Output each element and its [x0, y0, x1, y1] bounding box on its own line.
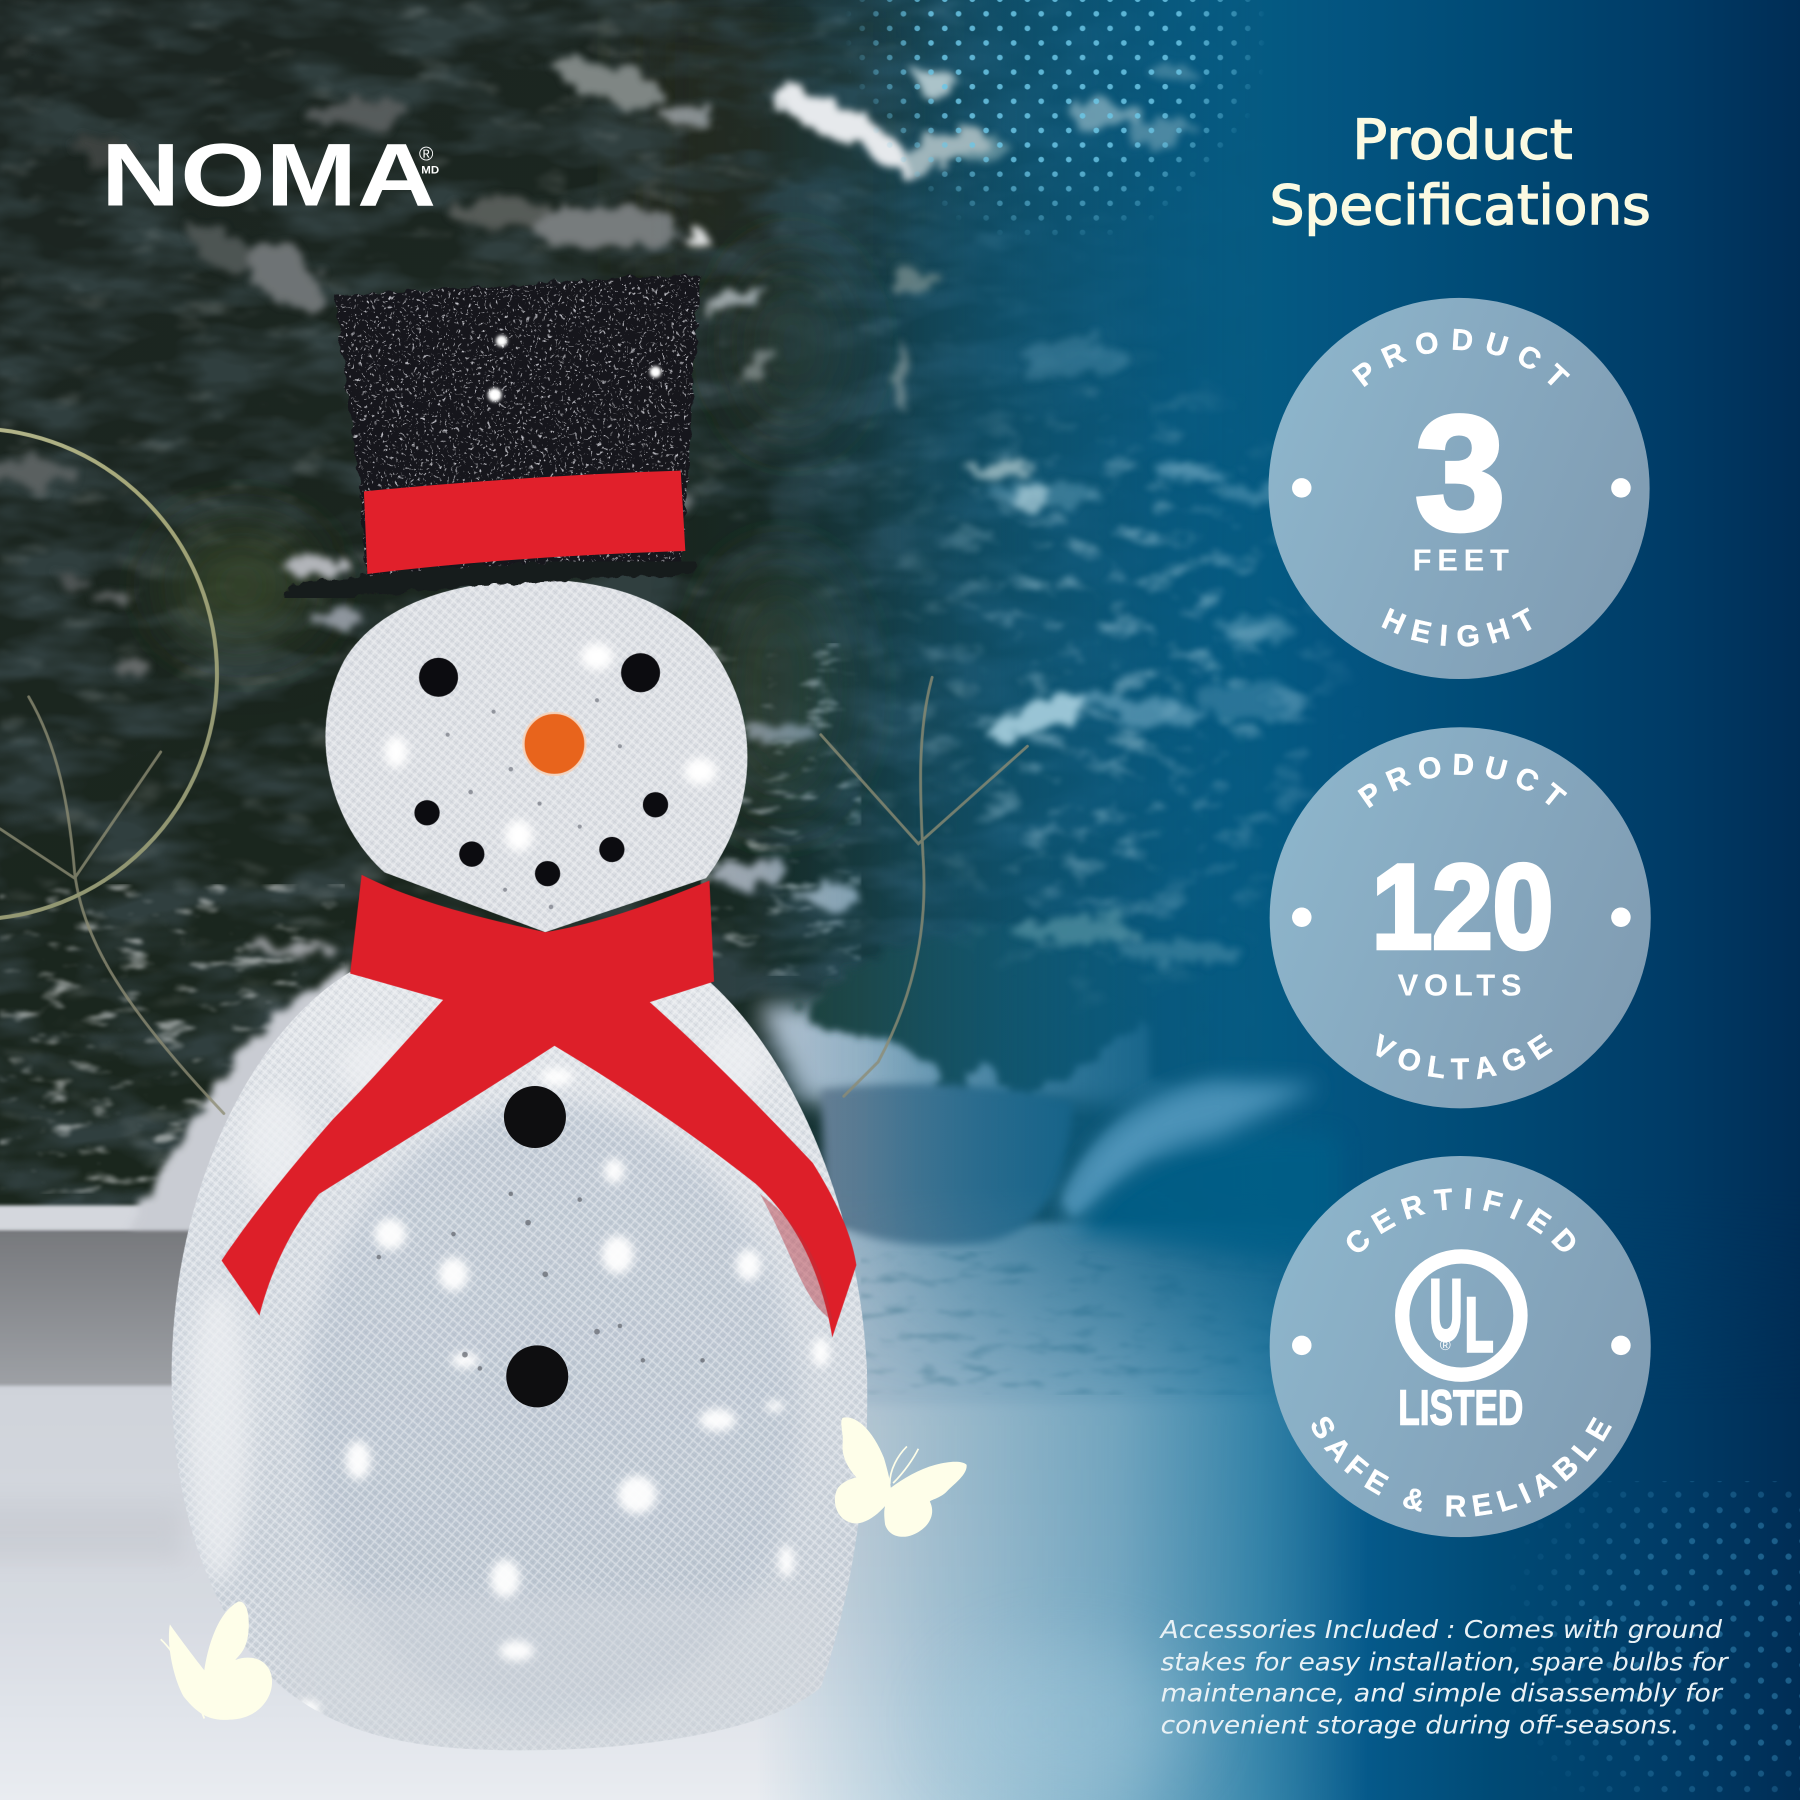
- badge: certified UL listed: SAFE & RELIABLE: [1303, 1406, 1622, 1524]
- title: Product Specifications: [1270, 108, 1651, 237]
- butterfly left: [161, 1601, 272, 1720]
- halftone dots, top: [848, 0, 1262, 235]
- badge: product voltage 120 volts: 120: [1372, 841, 1553, 974]
- badge: product voltage 120 volts: [1270, 727, 1651, 1108]
- badge: product voltage 120 volts: VOLTAGE: [1376, 1033, 1553, 1080]
- badge: product height 3 feet: PRODUCT: [1352, 328, 1570, 387]
- badge: product height 3 feet: FEET: [1413, 543, 1515, 578]
- NOMA logo: MD: [421, 164, 439, 176]
- NOMA logo: NOMA: [101, 124, 436, 224]
- face buttons: [414, 653, 668, 886]
- UL mark: ®: [1440, 1337, 1451, 1354]
- badge: product height 3 feet: 3: [1415, 381, 1506, 564]
- blue gradient overlay on right: [720, 0, 1800, 1800]
- accessories note: [1158, 1615, 1729, 1739]
- coat buttons: [504, 1086, 568, 1407]
- UL mark: LISTED: [1398, 1381, 1523, 1436]
- UL mark: L: [1465, 1283, 1493, 1368]
- top hat: [296, 273, 700, 595]
- title: Product Specifications: Product: [1352, 108, 1573, 171]
- UL mark: [1398, 1256, 1523, 1436]
- badge: product height 3 feet: [1268, 298, 1650, 679]
- accessories note: maintenance, and simple disassembly for: [1161, 1678, 1724, 1707]
- snow texture on blue foliage: [868, 386, 1345, 988]
- bare branches: [0, 677, 1027, 1114]
- title: Product Specifications: Specifications: [1270, 174, 1651, 237]
- butterfly right: [835, 1417, 967, 1537]
- snowman body: [161, 953, 884, 1756]
- UL mark: U: [1429, 1263, 1462, 1359]
- accessories note: convenient storage during off-seasons.: [1161, 1710, 1679, 1739]
- accessories note: stakes for easy installation, spare bulbs for: [1161, 1647, 1729, 1676]
- halftone dots, bottom right: [1524, 1481, 1800, 1792]
- badge: product voltage 120 volts: PRODUCT: [1358, 754, 1568, 808]
- snow-laden branch, upper centre: [677, 69, 987, 246]
- snow highlights on blue foliage: [891, 65, 1316, 963]
- badge: certified UL listed: CERTIFIED: [1346, 1188, 1576, 1252]
- badge: product voltage 120 volts: VOLTS: [1398, 967, 1527, 1002]
- accessories note: Accessories Included : Comes with ground: [1158, 1615, 1723, 1644]
- badge: product height 3 feet: HEIGHT: [1382, 608, 1532, 647]
- carrot nose: [523, 713, 585, 775]
- NOMA logo: ®: [419, 144, 434, 166]
- snowman: [161, 273, 884, 1756]
- decorative thin ring: [0, 428, 217, 920]
- scarf: [222, 875, 856, 1337]
- badge: certified UL listed: [1270, 1156, 1651, 1537]
- head: [325, 580, 748, 932]
